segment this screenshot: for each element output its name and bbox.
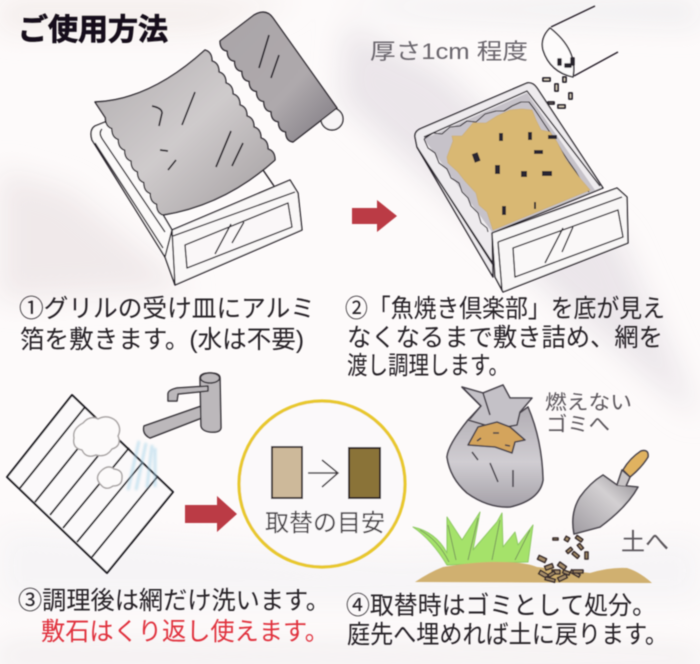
illustration: step 2 scoop and filled tray <box>415 6 628 292</box>
text: step 2: 渡し調理します。 <box>347 352 509 380</box>
text: step 2: ②「魚焼き倶楽部」を底が見え <box>345 295 665 323</box>
label: non-burnable: ゴミへ <box>546 413 610 436</box>
tray front panel <box>492 188 628 292</box>
illustration: step 1 foil and tray <box>91 12 343 285</box>
grill net <box>7 395 173 573</box>
text: step 3: ③調理後は網だけ洗います。 <box>18 587 330 615</box>
tray rim <box>415 83 603 277</box>
illustration: step 3 washing the grill net <box>7 373 221 573</box>
foil lining <box>424 93 595 232</box>
faucet <box>144 373 221 438</box>
charcoal sand <box>447 109 590 230</box>
text: step 1: 箔を敷きます。(水は不要) <box>20 326 304 354</box>
illustration: step 4 disposal <box>413 385 669 583</box>
arrow: change <box>308 460 338 487</box>
text: step 1 <box>19 295 315 354</box>
text: step 4: ④取替時はゴミとして処分。 <box>346 592 656 620</box>
text: step 2 <box>345 295 665 380</box>
tray front panel <box>165 180 302 285</box>
title: ご使用方法 <box>18 13 168 47</box>
text: step 3: 敷石はくり返し使えます。 <box>41 618 329 646</box>
scoop <box>542 6 618 77</box>
foil roll <box>220 12 343 142</box>
replacement guide circle <box>239 401 405 567</box>
falling chips <box>543 77 572 108</box>
trowel <box>573 451 648 534</box>
text: step 3 <box>18 587 330 646</box>
grass <box>413 512 533 565</box>
swatch: used <box>349 448 380 498</box>
label: non-burnable <box>545 391 632 436</box>
soil chips <box>538 535 588 582</box>
label: to soil: 土へ <box>621 529 669 556</box>
label: thickness: 厚さ1cm 程度 <box>370 39 528 64</box>
soap foam <box>74 417 120 456</box>
water stream <box>128 441 155 490</box>
label: non-burnable: 燃えない <box>545 391 632 414</box>
arrow: step 3 to replacement guide <box>185 496 237 532</box>
text: step 4: 庭先へ埋めれば土に戻ります。 <box>347 621 668 649</box>
label: 取替の目安 <box>265 510 385 537</box>
sand chips <box>472 132 557 215</box>
foil sheet <box>95 50 275 215</box>
garbage bag <box>447 385 543 507</box>
swatch: fresh <box>272 447 302 498</box>
text: step 2: なくなるまで敷き詰め、網を <box>347 324 663 352</box>
text: step 1: ①グリルの受け皿にアルミ <box>19 295 315 323</box>
tray body <box>91 122 274 257</box>
soil mound <box>415 562 652 583</box>
text: step 4 <box>346 592 668 649</box>
arrow: step 1 to step 2 <box>352 200 397 232</box>
